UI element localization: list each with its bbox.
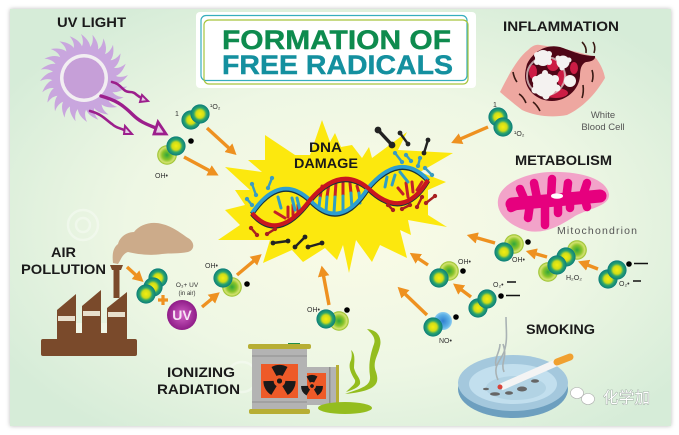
heading: air pollution: [21, 244, 106, 277]
molecule: singlet oxygen inflammation: [488, 102, 525, 138]
UV light sun icon: [40, 34, 128, 122]
title line 2: FREE RADICALS: [222, 50, 453, 80]
molecule: superoxide: [468, 282, 520, 318]
DNA fragments: [247, 130, 435, 247]
molecule: OH radical air: [205, 263, 250, 297]
DNA strand shadows: [252, 168, 428, 214]
heading: inflammation: INFLAMMATION: [503, 18, 619, 34]
plus sign: [158, 295, 168, 305]
UV wavy arrows: [90, 82, 166, 134]
heading: metabolism: METABOLISM: [515, 152, 612, 168]
WeChat icon: [570, 388, 594, 404]
heading: UV light: UV LIGHT: [57, 14, 126, 30]
UV circle: UV: [172, 307, 192, 323]
starburst: [218, 120, 453, 273]
heading: smoking: SMOKING: [526, 321, 595, 337]
radioactive barrels: [248, 343, 339, 414]
molecule: singlet oxygen UV: 1: [175, 111, 179, 118]
ozone label: [176, 282, 199, 297]
blue strand: [252, 167, 428, 213]
factory: [41, 265, 137, 356]
orange arrows: [127, 127, 598, 315]
DNA helix: [252, 167, 428, 226]
molecule: OH radical ionizing: [307, 307, 350, 331]
DNA rungs: [275, 172, 422, 218]
molecule: OH radical UV: OH•: [155, 173, 168, 180]
molecule: OH radical lower: OH•: [458, 259, 472, 266]
molecule: ozone in air: [136, 268, 168, 304]
watermark spirals: [68, 208, 559, 394]
molecule: superoxide right: [598, 260, 648, 289]
title box: [196, 12, 476, 88]
heading: DNA damage: DAMAGE: [294, 155, 358, 171]
heading: air pollution: AIR: [51, 244, 76, 260]
ozone label: (in air): [178, 291, 196, 297]
label: white blood cell: White: [591, 110, 615, 121]
molecule: OH radical ionizing: OH•: [307, 307, 320, 314]
molecule: singlet oxygen inflammation: 1: [493, 102, 497, 109]
molecule: hydrogen peroxide: [538, 240, 587, 282]
smoke cloud: [113, 223, 193, 264]
molecule: NO radical: [423, 312, 459, 345]
molecule: OH radical UV: [155, 136, 194, 180]
UV circle: [167, 300, 197, 330]
label: white blood cell: Blood Cell: [581, 122, 625, 133]
WeChat account name: 化学加: [603, 386, 650, 408]
molecule: OH radical air: OH•: [205, 263, 218, 270]
green spill and fumes: [318, 329, 380, 414]
label: white blood cell: [581, 110, 625, 133]
ozone label: O₃+ UV: [176, 282, 199, 289]
label: mitochondrion: Mitochondrion: [557, 225, 637, 237]
heading: DNA damage: DNA: [309, 139, 342, 155]
molecule: OH radical lower: [429, 259, 472, 288]
molecule: superoxide: O₂•: [493, 282, 504, 289]
molecule: OH radical upper: OH•: [512, 257, 526, 264]
molecule: singlet oxygen UV: ¹O₂: [210, 104, 221, 111]
heading: ionizing radiation: [157, 364, 240, 397]
ashtray with cigarette: [458, 317, 570, 418]
heading: ionizing radiation: IONIZING: [167, 364, 235, 380]
mitochondrion: [498, 172, 609, 232]
molecule: OH radical upper: [494, 234, 531, 264]
red strand: [252, 179, 428, 225]
molecule: singlet oxygen inflammation: ¹O₂: [514, 131, 525, 138]
heading: ionizing radiation: RADIATION: [157, 381, 240, 397]
inflammation white blood cell: [500, 42, 605, 116]
molecule: NO radical: NO•: [439, 338, 452, 345]
molecule: hydrogen peroxide: H₂O₂: [566, 275, 582, 282]
heading: DNA damage: [294, 139, 358, 171]
heading: air pollution: POLLUTION: [21, 261, 106, 277]
molecule: superoxide right: O₂•: [619, 281, 630, 288]
title line 1: FORMATION OF: [222, 25, 451, 55]
molecule: singlet oxygen UV: [175, 104, 221, 130]
